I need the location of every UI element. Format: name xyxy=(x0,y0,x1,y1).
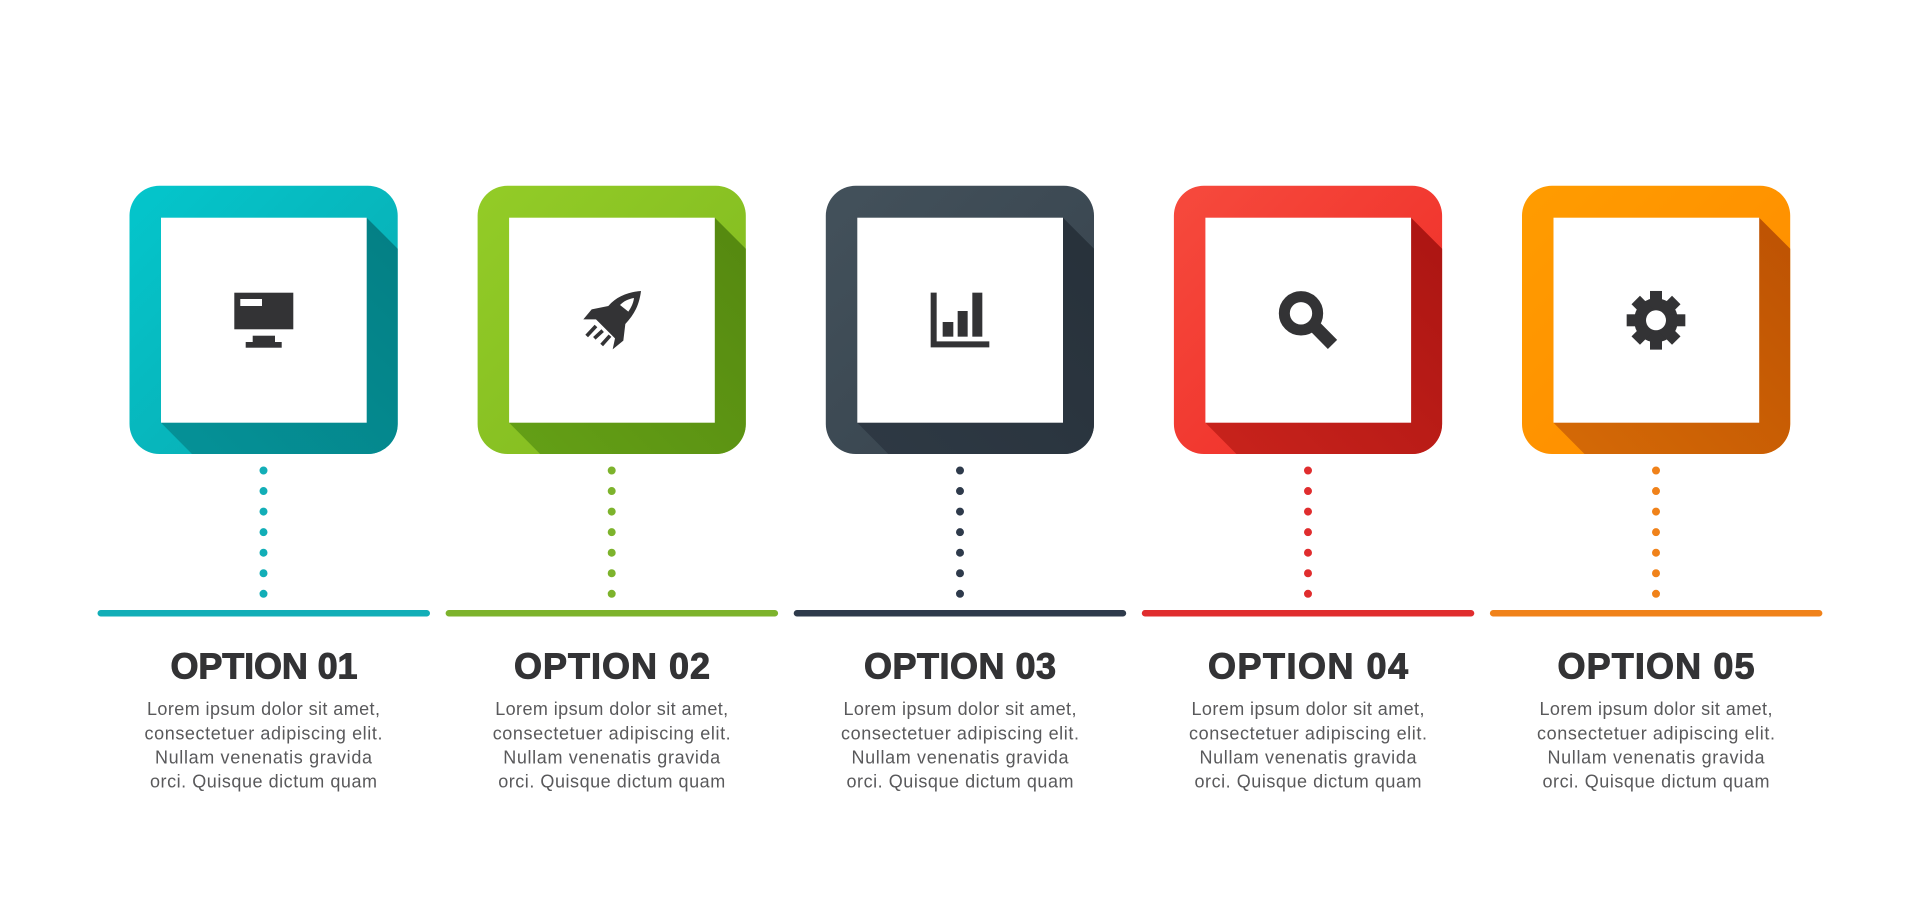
dotted connector xyxy=(260,470,268,595)
text block xyxy=(144,699,382,792)
text block: consectetuer adipiscing elit. xyxy=(841,723,1079,743)
icon: monitor xyxy=(234,293,293,348)
text block: Nullam venenatis gravida xyxy=(852,748,1069,768)
text block: consectetuer adipiscing elit. xyxy=(1537,723,1775,743)
heading: OPTION 04 xyxy=(1208,645,1408,686)
heading: OPTION 01 xyxy=(170,645,358,686)
text block: Lorem ipsum dolor sit amet, xyxy=(1192,699,1424,719)
dotted connector xyxy=(1652,470,1660,595)
dotted connector xyxy=(956,470,964,595)
heading: OPTION 05 xyxy=(1558,645,1754,686)
panel: option 03 xyxy=(794,186,1126,792)
divider bar xyxy=(1142,610,1474,616)
text block: Lorem ipsum dolor sit amet, xyxy=(147,699,380,719)
panel: option 02 xyxy=(446,186,778,792)
text block xyxy=(841,699,1079,792)
text block: Lorem ipsum dolor sit amet, xyxy=(1540,699,1772,719)
text block: consectetuer adipiscing elit. xyxy=(493,723,731,743)
dotted connector xyxy=(1304,470,1312,595)
text block: orci. Quisque dictum quam xyxy=(846,772,1074,792)
text block xyxy=(493,699,731,792)
divider bar xyxy=(98,610,430,616)
divider bar xyxy=(1490,610,1822,616)
text block: orci. Quisque dictum quam xyxy=(150,772,377,792)
card: option 05 frame xyxy=(1522,186,1790,454)
dotted connector xyxy=(608,470,616,595)
text block: consectetuer adipiscing elit. xyxy=(144,723,382,743)
icon: rocket xyxy=(583,291,641,349)
heading: OPTION 03 xyxy=(864,645,1056,686)
text block: orci. Quisque dictum quam xyxy=(498,772,725,792)
icon: gear xyxy=(1627,291,1685,350)
icon: bar chart xyxy=(931,293,989,347)
text block: Nullam venenatis gravida xyxy=(1200,748,1417,768)
text block: Nullam venenatis gravida xyxy=(155,748,373,768)
text block: Lorem ipsum dolor sit amet, xyxy=(844,699,1076,719)
text block: orci. Quisque dictum quam xyxy=(1542,772,1770,792)
heading: OPTION 02 xyxy=(514,645,710,686)
card: option 03 frame xyxy=(826,186,1094,454)
panel: option 01 xyxy=(98,186,430,792)
text block xyxy=(1189,699,1427,792)
divider bar xyxy=(446,610,778,616)
card: option 02 frame xyxy=(478,186,746,454)
text block: orci. Quisque dictum quam xyxy=(1194,772,1422,792)
text block: Nullam venenatis gravida xyxy=(503,748,721,768)
card: option 04 frame xyxy=(1174,186,1442,454)
text block: consectetuer adipiscing elit. xyxy=(1189,723,1427,743)
card: option 01 frame xyxy=(130,186,398,454)
text block: Nullam venenatis gravida xyxy=(1548,748,1765,768)
divider bar xyxy=(794,610,1126,616)
text block xyxy=(1537,699,1775,792)
text block: Lorem ipsum dolor sit amet, xyxy=(495,699,728,719)
panel: option 04 xyxy=(1142,186,1474,792)
icon: magnifier xyxy=(1284,297,1332,344)
panel: option 05 xyxy=(1490,186,1822,792)
